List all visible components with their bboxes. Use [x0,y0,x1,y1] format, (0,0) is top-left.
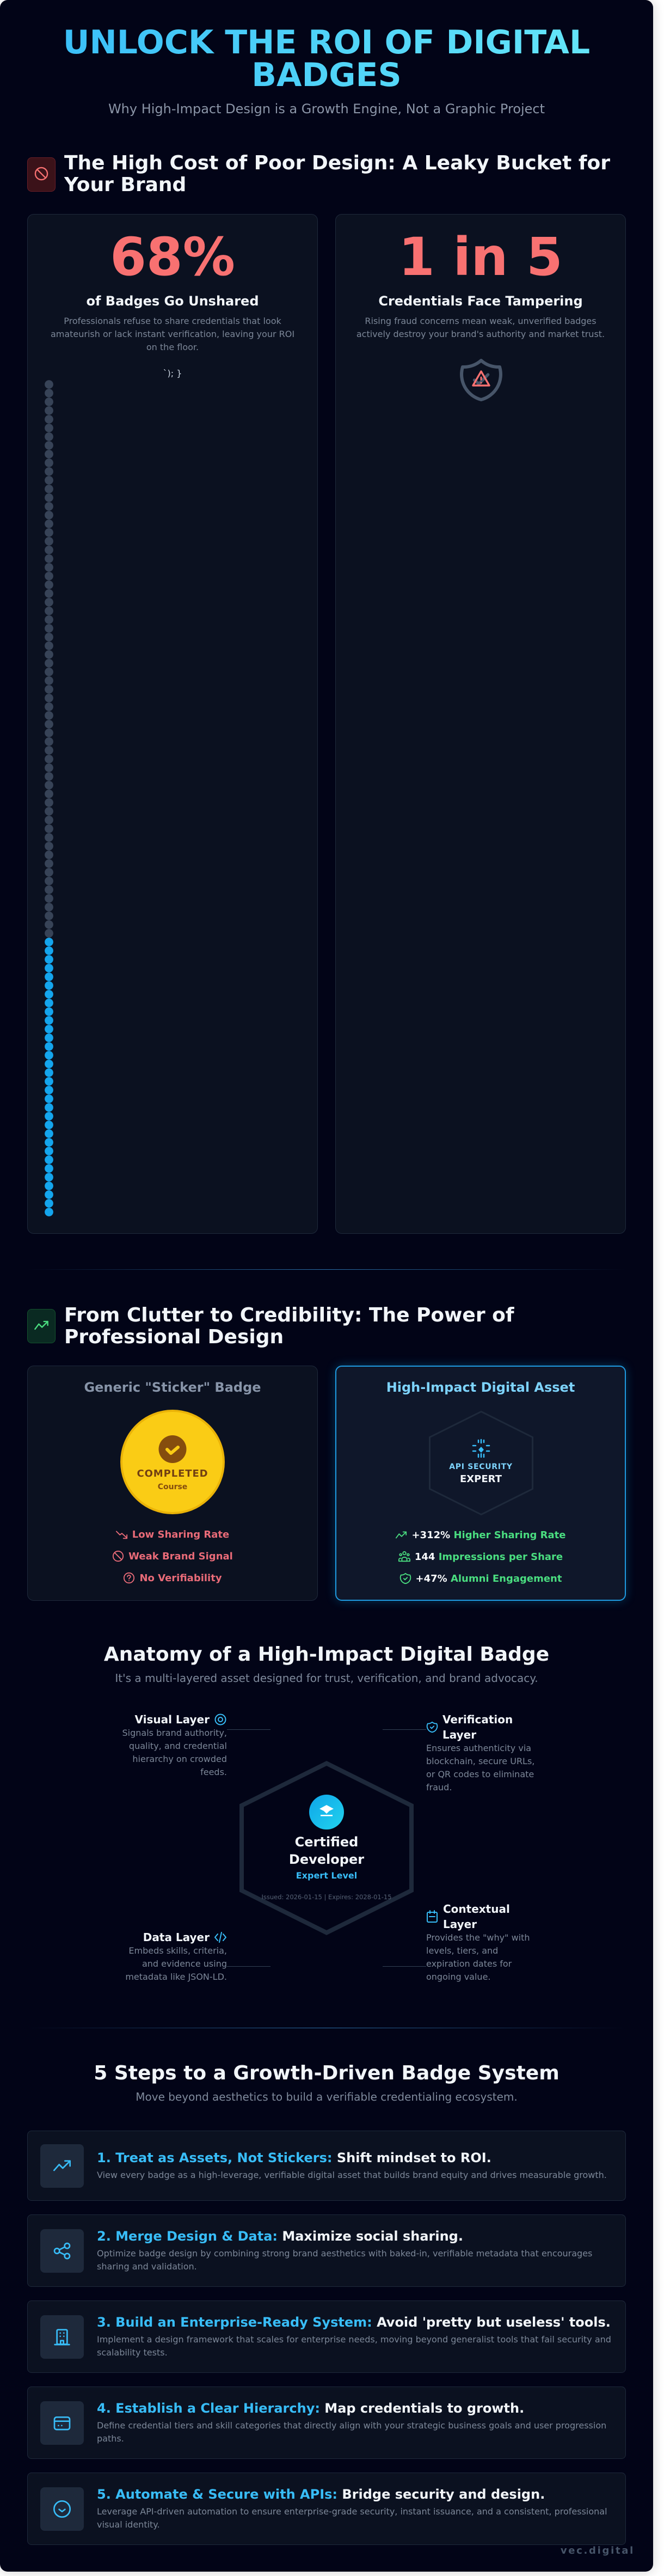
panel heading: generic: Generic "Sticker" Badge [84,1380,261,1395]
problem: low sharing rate: Low Sharing Rate [132,1529,229,1540]
panel: step 3 [27,2300,626,2373]
step 3 text: Implement a design framework that scales for enterprise needs, moving beyond generalist tools that fail security and [97,2334,611,2345]
panel: step 2 [27,2214,626,2287]
callout: contextual layer [426,1902,530,1982]
step 2 text: sharing and validation. [97,2261,197,2272]
connector: verification layer [383,1729,426,1730]
connector: contextual layer [383,1966,426,1967]
icon: credit card [40,2401,84,2445]
step 5 title: 5. Automate & Secure with APIs: Bridge security and design. [97,2487,545,2502]
benefit: alumni engagement: +47% Alumni Engagement [416,1573,562,1584]
step 2 text [97,2248,592,2272]
badge: completed course sticker [120,1410,225,1514]
callout title: Layer [443,1918,477,1931]
badge label: course: Course [158,1483,187,1491]
text: unshared description: on the floor. [146,342,199,352]
step 4 text: Define credential tiers and skill categories that directly align with your strategic business goals and user progression [97,2420,606,2431]
callout text: ongoing value. [426,1972,491,1982]
callout text: or QR codes to eliminate [426,1769,534,1779]
callout text: Signals brand authority, [122,1728,227,1738]
callout: verification layer [426,1713,534,1792]
step 1 title: 1. Treat as Assets, Not Stickers: Shift mindset to ROI. [97,2150,491,2165]
problem: weak brand signal: Weak Brand Signal [128,1551,233,1562]
icon: code [214,1932,226,1943]
step 4 title: 4. Establish a Clear Hierarchy: Map credentials to growth. [97,2401,524,2416]
panel: 1 in 5 [335,214,626,1234]
callout text [125,1945,227,1982]
step 5 text: visual identity. [97,2519,160,2530]
benefit: impressions: 144 Impressions per Share [415,1551,563,1563]
icon: ban section marker [27,157,56,192]
text: tampering description: actively destroy your brand's authority and market trust. [356,329,605,339]
text: unshared description [51,316,294,352]
callout title: Layer [442,1728,476,1741]
step 5 text: Leverage API-driven automation to ensure enterprise-grade security, instant issuance, and a consistent, professional [97,2506,607,2517]
step 4 text: paths. [97,2433,124,2444]
step 1 text: View every badge as a high-leverage, verifiable digital asset that builds brand equity and drives measurable growth. [97,2170,607,2180]
heading: high cost of poor design: The High Cost of Poor Design: A Leaky Bucket for [64,152,610,174]
panel: 68 percent [27,214,318,1234]
callout: visual layer [122,1713,227,1777]
callout text: quality, and credential [129,1741,227,1751]
panel: step 1 [27,2131,626,2201]
icon: share [40,2229,84,2273]
badge text: api security: API SECURITY [449,1463,513,1471]
callout text: Provides the "why" with [426,1932,530,1943]
chart: blue shared dots [45,938,53,1216]
heading: clutter to credibility: From Clutter to Credibility: The Power of [64,1304,514,1326]
callout text: expiration dates for [426,1959,512,1969]
callout title [443,1902,510,1931]
title [27,26,626,91]
callout text: and evidence using [142,1959,227,1969]
icon: api security [472,1439,490,1458]
callout text: Embeds skills, criteria, [128,1945,227,1956]
text: tampering description: Rising fraud concerns mean weak, unverified badges [365,316,597,326]
badge title: certified developer: Certified [295,1834,358,1850]
callout text: fraud. [426,1782,452,1792]
icon: building [40,2315,84,2359]
callout text [122,1728,227,1777]
callout title: Visual Layer [134,1713,210,1726]
step 3 text: scalability tests. [97,2347,168,2358]
step 2 title: 2. Merge Design & Data: Maximize social sharing. [97,2229,463,2244]
heading: clutter to credibility: Professional Design [64,1326,284,1348]
text: unshared description: amateurish or lack instant verification, leaving your ROI [51,329,294,339]
panel: step 4 [27,2387,626,2459]
step 3 text [97,2334,611,2358]
callout: data layer [125,1931,227,1982]
panel: generic sticker badge [27,1366,318,1601]
heading: high cost of poor design: Your Brand [64,174,186,196]
badge text: expert: EXPERT [460,1473,502,1485]
stat label: credentials tampering: Credentials Face Tampering [378,293,583,309]
panel: high-impact digital asset [335,1366,626,1601]
icon: circle chevron [40,2487,84,2531]
heading: anatomy: Anatomy of a High-Impact Digital Badge [104,1643,549,1666]
callout text [426,1932,530,1982]
icon: graduation cap [309,1795,344,1829]
step 2 text: Optimize badge design by combining strong brand aesthetics with baked-in, verifiable metadata that encourages [97,2248,592,2259]
callout text: blockchain, secure URLs, [426,1756,534,1766]
heading: high cost of poor design [64,152,610,196]
badge dates: Issued: 2026-01-15 | Expires: 2028-01-15 [261,1893,392,1901]
watermark: vec.digital [561,2545,635,2556]
stat label: badges unshared: of Badges Go Unshared [86,293,259,309]
badge title: certified developer: Developer [289,1852,364,1867]
callout text: hierarchy on crowded [132,1754,227,1764]
text: tampering description [356,316,605,339]
icon: tampered shield [460,359,502,401]
heading: clutter to credibility [64,1304,514,1348]
stat: 1 in 5: 1 in 5 [398,227,563,287]
badge level: expert: Expert Level [296,1870,357,1881]
stat: 68%: 68% [110,227,235,287]
step 5 text [97,2506,607,2530]
title: BADGES [251,56,402,94]
callout title: Verification [442,1713,513,1726]
icon: trending up section marker [27,1309,56,1343]
subtitle: anatomy: It's a multi-layered asset designed for trust, verification, and brand advocacy. [115,1672,538,1685]
title: UNLOCK THE ROI OF DIGITAL [63,23,590,62]
heading: five steps: 5 Steps to a Growth-Driven Badge System [94,2062,560,2084]
callout text [426,1743,534,1792]
diagram: central hexagon badge [239,1761,414,1935]
step 3 title: 3. Build an Enterprise-Ready System: Avoid 'pretty but useless' tools. [97,2315,611,2330]
icon: eye target [214,1714,226,1725]
subtitle: Why High-Impact Design is a Growth Engine, Not a Graphic Project [108,101,545,117]
connector: data layer [227,1966,270,1967]
step 4 text [97,2420,606,2444]
panel heading: high-impact: High-Impact Digital Asset [386,1380,575,1395]
panel: step 5 [27,2473,626,2545]
callout title: Contextual [443,1902,510,1916]
stray code text: `); } [163,368,182,378]
icon: calendar [427,1910,438,1923]
connector: visual layer [227,1729,270,1730]
icon: shield check [427,1722,438,1733]
subtitle: five steps: Move beyond aesthetics to build a verifiable credentialing ecosystem. [136,2090,518,2103]
callout text: feeds. [200,1767,227,1777]
icon: check circle [159,1435,186,1463]
chart: grey unshared dots [45,380,53,938]
divider [27,1269,626,1270]
badge title: certified developer [289,1834,365,1867]
badge: api security expert hexagon [429,1411,533,1515]
callout text: levels, tiers, and [426,1945,498,1956]
callout title: Data Layer [143,1931,210,1944]
callout title [442,1713,513,1741]
callout text: metadata like JSON-LD. [125,1972,227,1982]
callout text: Ensures authenticity via [426,1743,531,1753]
problem: no verifiability: No Verifiability [139,1572,222,1584]
badge label: completed: COMPLETED [137,1468,208,1479]
text: unshared description: Professionals refuse to share credentials that look [64,316,281,326]
benefit: sharing rate: +312% Higher Sharing Rate [411,1529,566,1541]
icon: trending up [40,2144,84,2188]
